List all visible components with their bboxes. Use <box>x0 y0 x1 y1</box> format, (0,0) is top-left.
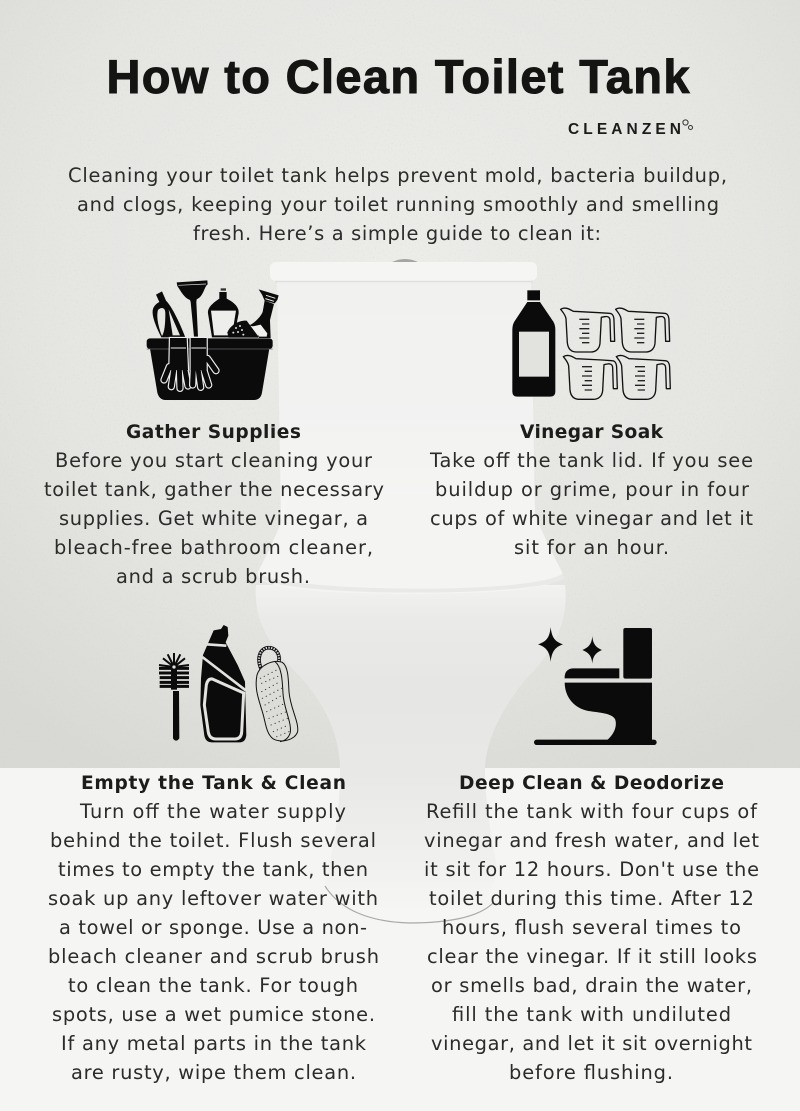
toilet bowl <box>256 585 566 923</box>
toilet seat <box>258 495 562 594</box>
toilet tank <box>623 628 652 679</box>
step 1: gather supplies: supplies. Get white vinegar, a <box>59 507 368 530</box>
icon: sparkling toilet <box>534 627 657 745</box>
measuring cup 1 <box>561 308 615 352</box>
left bottle <box>153 291 185 337</box>
step 4: deep clean and deodorize <box>424 773 759 1084</box>
step 3: empty the tank and clean: Empty the Tank & Clean <box>81 773 346 794</box>
vinegar bottle <box>512 290 555 397</box>
toilet bowl <box>565 683 652 740</box>
step 2: vinegar soak <box>429 422 753 559</box>
small sparkle <box>582 636 602 664</box>
measuring cup 4 <box>616 355 670 399</box>
background wall <box>0 0 800 768</box>
cleaner bottle <box>200 625 246 742</box>
step 1: gather supplies: toilet tank, gather the necessary <box>44 478 384 501</box>
step 4: deep clean and deodorize: it sit for 12 hours. Don't use the <box>424 858 759 881</box>
step 4: deep clean and deodorize: Refill the tank with four cups of <box>426 800 758 823</box>
step 4: deep clean and deodorize: toilet during this time. After 12 <box>429 887 754 910</box>
basin <box>150 349 269 400</box>
icon: vinegar bottle and measuring cups <box>512 290 670 399</box>
step 1: gather supplies: and a scrub brush. <box>116 565 310 588</box>
measuring cup 2 <box>616 308 670 352</box>
step 2: vinegar soak: cups of white vinegar and let it <box>430 507 753 530</box>
toilet tank lid <box>270 259 537 282</box>
floor line <box>534 740 657 745</box>
step 4: deep clean and deodorize: vinegar and fresh water, and let <box>424 829 759 852</box>
step 3: empty the tank and clean: a towel or sponge. Use a non- <box>59 916 367 939</box>
sponge <box>227 321 258 338</box>
toilet base outline <box>325 886 493 923</box>
toilet illustration <box>256 259 566 923</box>
step 3: empty the tank and clean: Turn off the water supply <box>79 800 346 823</box>
title: How to Clean Toilet Tank <box>106 50 690 103</box>
step 4: deep clean and deodorize: fill the tank with undiluted <box>452 1003 731 1026</box>
step 4: deep clean and deodorize: Deep Clean & Deodorize <box>459 773 724 794</box>
step 3: empty the tank and clean: are rusty, wipe them clean. <box>71 1061 356 1084</box>
left glove <box>164 337 189 388</box>
step 4: deep clean and deodorize: or smells bad, drain the water, <box>431 974 752 997</box>
icon: brush, cleaner bottle and pumice <box>159 625 298 742</box>
step 3: empty the tank and clean: to clean the tank. For tough <box>68 974 358 997</box>
measuring cup 3 <box>563 355 617 399</box>
toilet tank body <box>277 280 535 520</box>
brand logo: CLEANZEN <box>568 121 681 138</box>
step 1: gather supplies: bleach-free bathroom cleaner, <box>54 536 373 559</box>
step 3: empty the tank and clean <box>48 773 379 1084</box>
bottom light panel <box>0 768 800 1111</box>
step 4: deep clean and deodorize: hours, flush several times to <box>442 916 741 939</box>
step 3: empty the tank and clean: If any metal parts in the tank <box>61 1032 367 1055</box>
toilet brush <box>159 653 189 741</box>
step 3: empty the tank and clean: soak up any leftover water with <box>48 887 378 910</box>
step 4: deep clean and deodorize: before flushing. <box>509 1061 673 1084</box>
step 1: gather supplies <box>44 422 384 588</box>
step 3: empty the tank and clean: behind the toilet. Flush several <box>50 829 376 852</box>
icon: supplies basin <box>147 280 279 400</box>
step 3: empty the tank and clean: times to empty the tank, then <box>58 858 368 881</box>
right glove <box>190 337 216 387</box>
plunger <box>177 280 208 337</box>
intro text: fresh. Here’s a simple guide to clean it: <box>193 222 601 245</box>
step 2: vinegar soak: buildup or grime, pour in four <box>435 478 749 501</box>
step 4: deep clean and deodorize: clear the vinegar. If it still looks <box>427 945 757 968</box>
intro text: and clogs, keeping your toilet running smoothly and smelling <box>77 193 719 216</box>
step 3: empty the tank and clean: spots, use a wet pumice stone. <box>52 1003 375 1026</box>
step 2: vinegar soak: Vinegar Soak <box>520 422 664 443</box>
dish soap bottle <box>208 292 239 337</box>
intro text: Cleaning your toilet tank helps prevent mold, bacteria buildup, <box>68 164 727 187</box>
step 1: gather supplies: Before you start cleaning your <box>55 449 372 472</box>
large sparkle <box>538 627 563 662</box>
toilet lid <box>565 668 619 678</box>
pumice sponge <box>256 648 298 742</box>
step 3: empty the tank and clean: bleach cleaner and scrub brush <box>48 945 379 968</box>
step 1: gather supplies: Gather Supplies <box>126 422 301 443</box>
spray bottle <box>249 301 274 338</box>
step 4: deep clean and deodorize: vinegar, and let it sit overnight <box>431 1032 752 1055</box>
step 2: vinegar soak: Take off the tank lid. If you see <box>429 449 753 472</box>
intro text <box>68 164 727 245</box>
step 2: vinegar soak: sit for an hour. <box>514 536 669 559</box>
